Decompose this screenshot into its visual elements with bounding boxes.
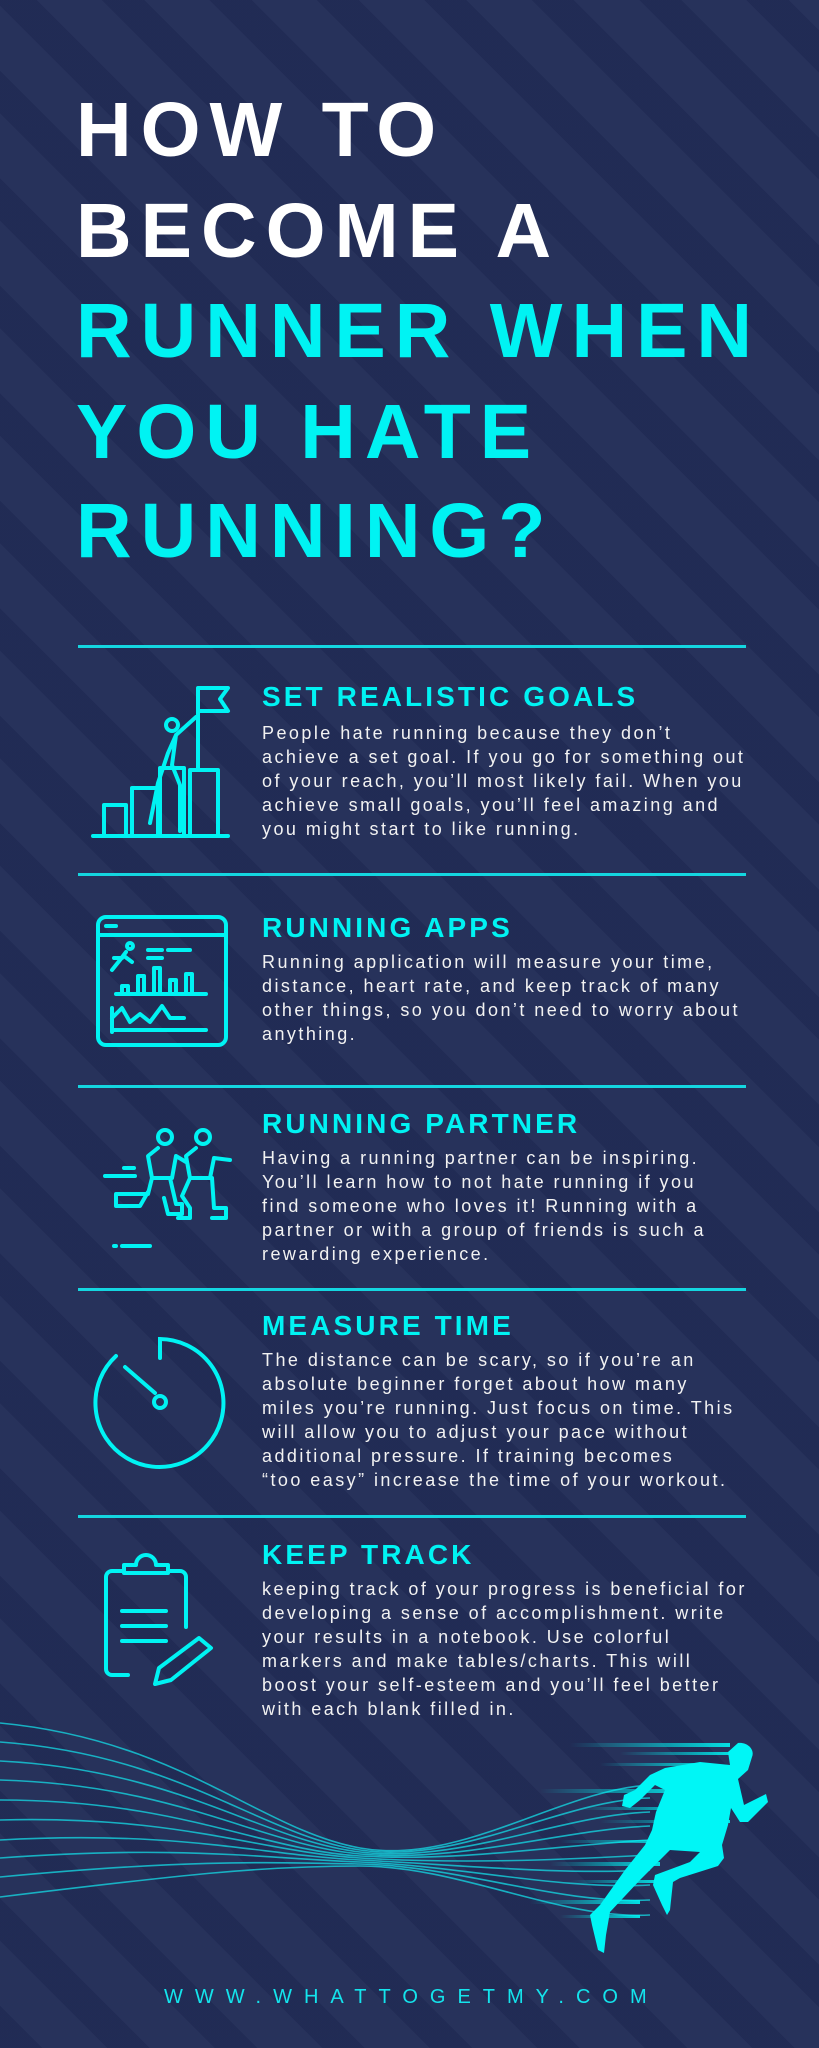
text block: additional pressure. If training becomes — [262, 1446, 674, 1466]
panel: measure time — [93, 1310, 735, 1490]
text block: Having a running partner can be inspiring. — [262, 1148, 699, 1168]
text block — [262, 1579, 747, 1719]
heading: KEEP TRACK — [262, 1539, 475, 1570]
title — [76, 87, 761, 574]
icon: app window — [96, 915, 228, 1047]
text block: will allow you to adjust your pace without — [262, 1422, 689, 1442]
text block: your results in a notebook. Use colorful — [262, 1627, 671, 1647]
title: YOU HATE — [76, 389, 540, 475]
text block: achieve small goals, you’ll feel amazing and — [262, 795, 720, 815]
title: HOW TO — [76, 87, 445, 173]
icon: clipboard with pencil — [104, 1553, 214, 1686]
text block: You’ll learn how to not hate running if you — [262, 1172, 696, 1192]
text block: with each blank filled in. — [262, 1699, 516, 1719]
footer url: WWW.WHATTOGETMY.COM — [164, 1986, 659, 2008]
text block — [262, 723, 745, 839]
panel: keep track — [104, 1539, 747, 1719]
panel: running apps — [96, 912, 740, 1047]
title: RUNNING? — [76, 488, 554, 574]
text block: boost your self-esteem and you’ll feel better — [262, 1675, 720, 1695]
text block: markers and make tables/charts. This will — [262, 1651, 692, 1671]
text block: find someone who loves it! Running with a — [262, 1196, 699, 1216]
panel: set realistic goals — [91, 681, 745, 839]
text block: absolute beginner forget about how many — [262, 1374, 689, 1394]
waves — [0, 1723, 650, 1915]
heading: MEASURE TIME — [262, 1310, 514, 1341]
text block: “too easy” increase the time of your workout. — [262, 1470, 727, 1490]
heading: SET REALISTIC GOALS — [262, 681, 638, 712]
text block: partner or with a group of friends is such a — [262, 1220, 706, 1240]
heading: RUNNING PARTNER — [262, 1108, 580, 1139]
text block: People hate running because they don’t — [262, 723, 672, 743]
text block: rewarding experience. — [262, 1244, 491, 1264]
text block — [262, 952, 740, 1044]
text block: achieve a set goal. If you go for something out — [262, 747, 745, 767]
text block: of your reach, you’ll most likely fail. When you — [262, 771, 744, 791]
title: BECOME A — [76, 188, 560, 274]
text block: distance, heart rate, and keep track of many — [262, 976, 721, 996]
text block: you might start to like running. — [262, 819, 581, 839]
illustration: waves and runner — [0, 1722, 768, 1953]
runner silhouette — [590, 1743, 768, 1953]
icon: timer — [93, 1337, 226, 1469]
text block: developing a sense of accomplishment. write — [262, 1603, 726, 1623]
panel: running partner — [103, 1108, 706, 1264]
speed lines — [530, 1743, 730, 1918]
title: RUNNER WHEN — [76, 288, 761, 374]
text block: other things, so you don’t need to worry about — [262, 1000, 740, 1020]
text block — [262, 1148, 706, 1264]
icon: two runners — [103, 1128, 232, 1248]
text block: The distance can be scary, so if you’re an — [262, 1350, 696, 1370]
text block: keeping track of your progress is beneficial for — [262, 1579, 747, 1599]
text block: Running application will measure your time, — [262, 952, 715, 972]
text block: miles you’re running. Just focus on time. This — [262, 1398, 735, 1418]
icon: climber with flag — [91, 686, 230, 838]
text block: anything. — [262, 1024, 357, 1044]
heading: RUNNING APPS — [262, 912, 513, 943]
text block — [262, 1350, 735, 1490]
